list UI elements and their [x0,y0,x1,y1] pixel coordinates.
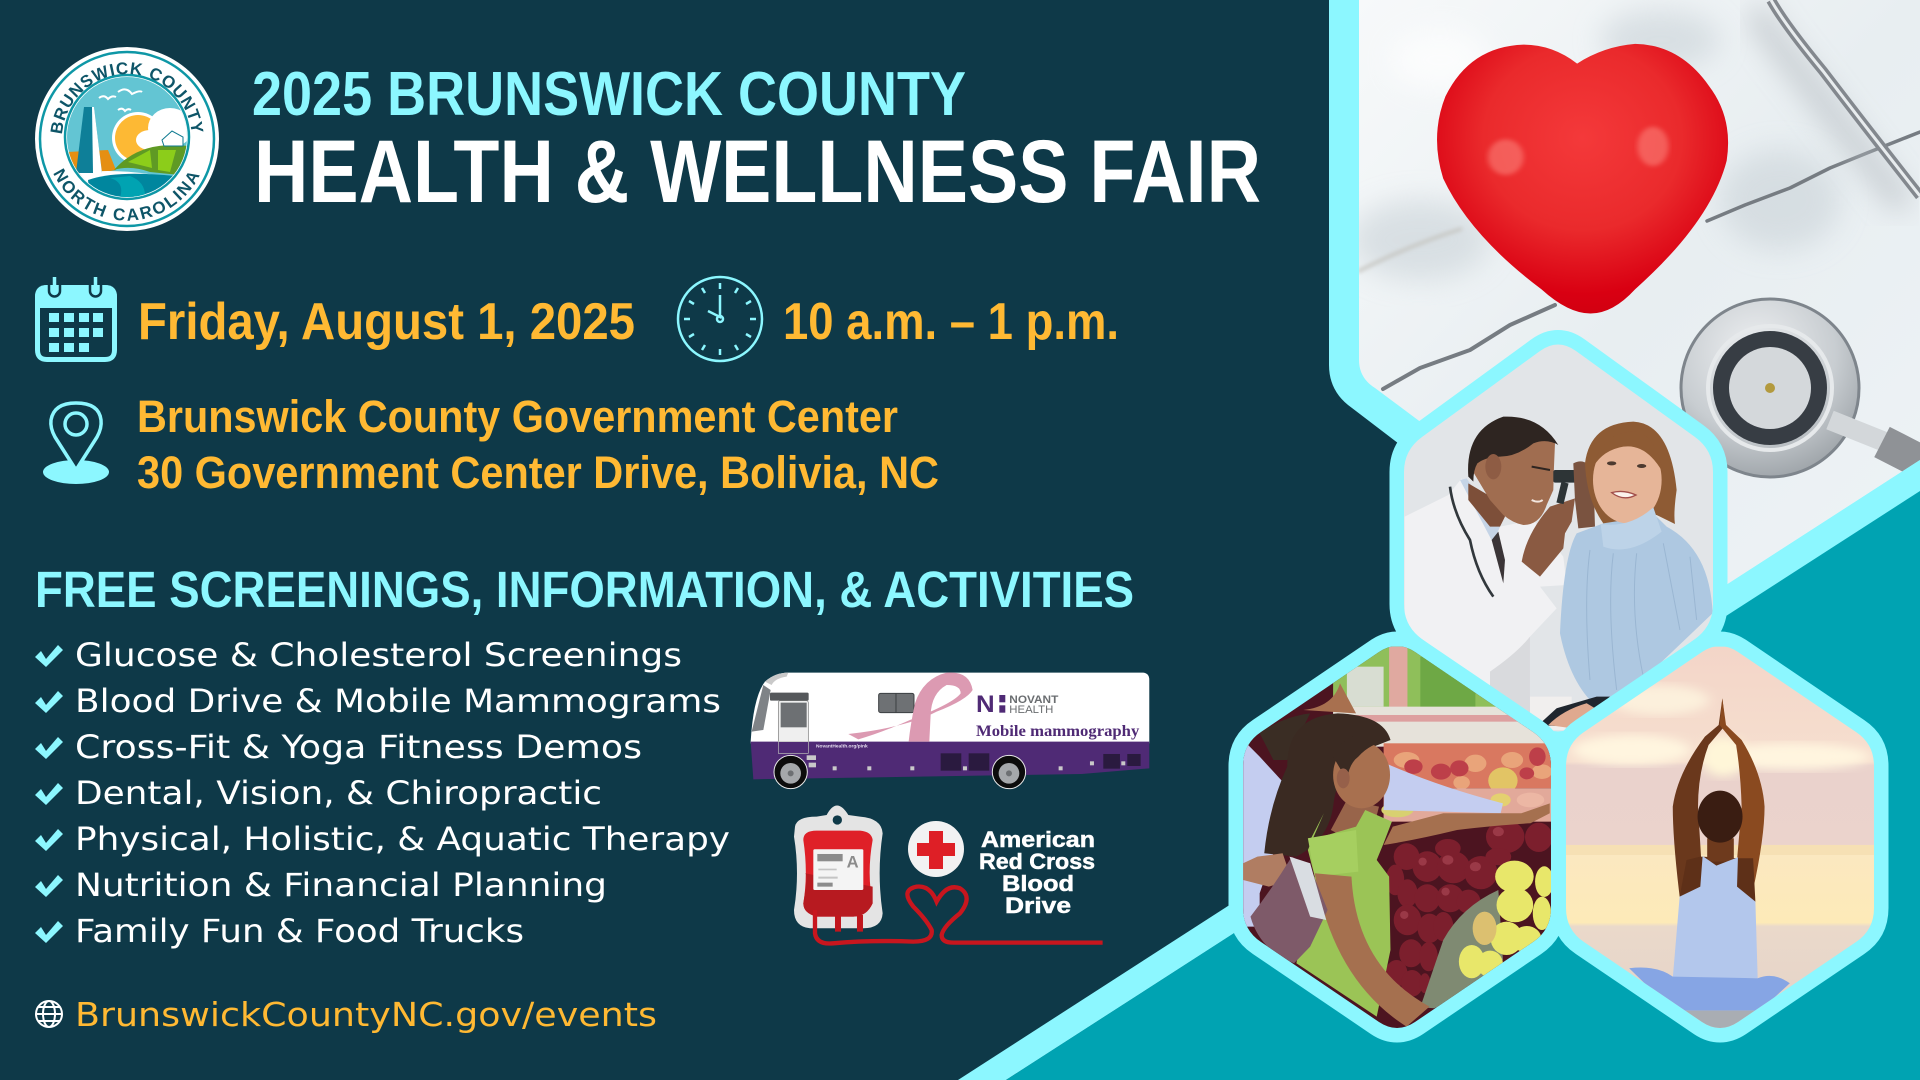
date: Friday, August 1, 2025 [138,293,635,351]
text: American Red Cross Blood Drive: Red Cross [979,849,1095,874]
girl [1264,713,1550,1027]
illustration: Novant Health mobile mammography bus: Mobile mammography [976,723,1140,740]
Novant Health wordmark [976,691,1059,718]
title line 1: 2025 BRUNSWICK COUNTY [252,60,966,129]
time: 10 a.m. – 1 p.m. [783,293,1119,351]
text: American Red Cross Blood Drive: Drive [1005,893,1071,918]
text: American Red Cross Blood Drive: Blood [1002,871,1074,896]
website url: BrunswickCountyNC.gov/events [75,995,657,1034]
coat [1404,478,1565,685]
diagonal cyan band [958,460,1920,1080]
title line 2: HEALTH & WELLNESS FAIR [254,121,1261,221]
list text: Physical, Holistic, & Aquatic Therapy [75,820,730,858]
title [252,60,1261,221]
wheels [774,755,1026,789]
pink ribbon [848,672,973,742]
photo: woman meditating in a yoga pose at sunset [1563,646,1879,1031]
heading: free screenings: FREE SCREENINGS, INFORMATION, & ACTIVITIES [35,561,1134,618]
icon: stethoscope chest piece [1681,299,1920,477]
Novant Health wordmark: HEALTH [1009,704,1053,716]
list text: Glucose & Cholesterol Screenings [75,636,682,674]
photo: doctor examining a patient's ear [1390,333,1730,767]
venue address: 30 Government Center Drive, Bolivia, NC [137,447,939,498]
Novant Health wordmark: N [976,691,995,718]
list text: Cross-Fit & Yoga Fitness Demos [75,728,642,766]
logo: Brunswick County seal [35,47,219,231]
logo: Brunswick County seal: NORTH CAROLINA [54,168,200,221]
illustration: Novant Health mobile mammography bus [751,672,1149,789]
illustration: Novant Health mobile mammography bus: NovantHealth.org/pink [816,743,868,748]
list text: Blood Drive & Mobile Mammograms [75,682,721,720]
list of screenings and activities [35,636,730,950]
icon: globe [36,1001,62,1027]
woman's hair and face [1585,422,1677,524]
woman's sweater [1560,513,1713,707]
photo: girl and mother choosing apples [1241,646,1553,1030]
list text [75,636,730,950]
icon: red heart [1437,44,1728,314]
logo: Brunswick County seal: BRUNSWICK COUNTY [50,62,204,134]
icon: Red Cross emblem [908,821,964,877]
text: American Red Cross Blood Drive [979,827,1095,918]
icon: calendar [35,277,117,360]
list text: Family Fun & Food Trucks [75,912,524,950]
Novant Health wordmark: NOVANT [1009,694,1059,706]
venue address: Brunswick County Government Center [137,391,898,442]
icon: map pin [43,403,109,484]
icon: clock [678,277,762,361]
red apples [1385,820,1553,997]
man's head [1474,441,1555,525]
venue address [137,391,939,498]
teal lower-right panel [1006,491,1920,1080]
text: American Red Cross Blood Drive: American [981,827,1095,852]
list text: Nutrition & Financial Planning [75,866,607,904]
illustration: blood bag with heart-shaped tube [794,805,1103,944]
check marks [35,645,63,943]
list text: Dental, Vision, & Chiropractic [75,774,602,812]
panel: cyan frame of the top photo [1329,0,1920,603]
mother [1243,745,1282,927]
photo: stress heart and stethoscope on marble [1350,0,1920,610]
illustration: blood bag with heart-shaped tube: A [847,852,859,871]
